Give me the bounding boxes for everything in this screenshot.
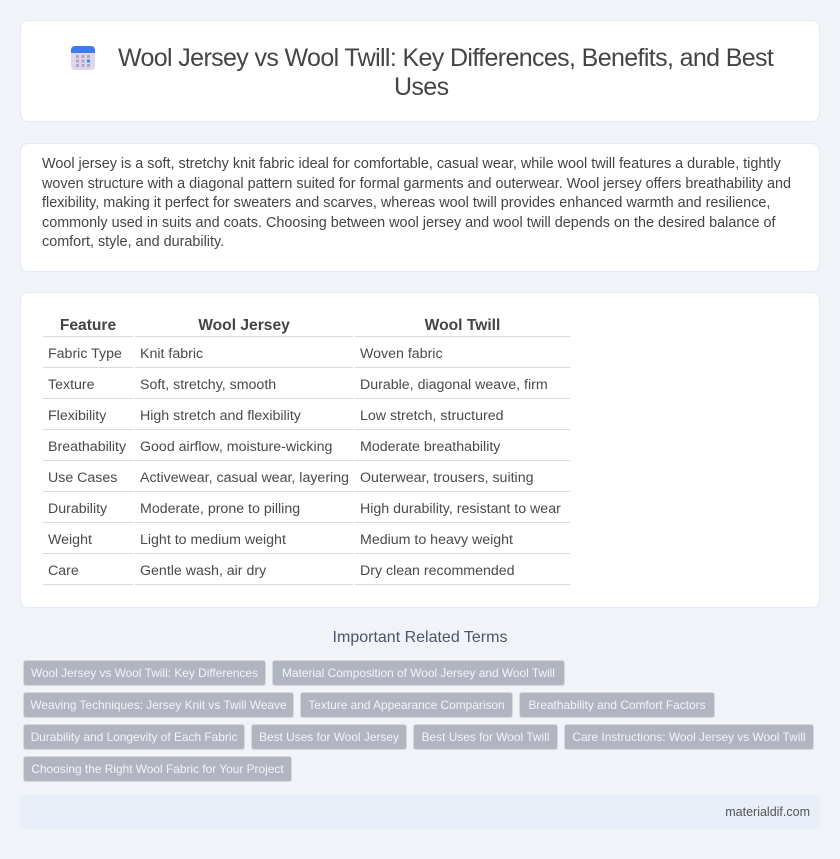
related terms tags: Choosing the Right Wool Fabric for Your Project — [31, 762, 284, 776]
comparison table: Wool Twill — [425, 317, 500, 334]
intro paragraph: comfort, style, and durability. — [42, 234, 224, 250]
comparison table: Soft, stretchy, smooth — [140, 377, 276, 393]
comparison table: Good airflow, moisture-wicking — [140, 439, 332, 455]
comparison table: Feature — [60, 317, 116, 334]
related terms tags: Best Uses for Wool Twill — [422, 730, 549, 744]
related terms tags: Durability and Longevity of Each Fabric — [31, 730, 237, 744]
comparison table: Outerwear, trousers, suiting — [360, 470, 533, 486]
title — [118, 44, 774, 101]
comparison table: Breathability — [48, 439, 126, 455]
intro paragraph — [42, 156, 791, 250]
table card — [20, 292, 820, 608]
comparison table: High durability, resistant to wear — [360, 501, 561, 517]
related terms tags: Weaving Techniques: Jersey Knit vs Twill Weave — [30, 698, 287, 712]
related terms tags: Breathability and Comfort Factors — [528, 698, 706, 712]
comparison table: Wool Jersey — [198, 317, 290, 334]
related terms tags: Best Uses for Wool Jersey — [259, 730, 399, 744]
intro paragraph: Wool jersey is a soft, stretchy knit fabric ideal for comfortable, casual wear, while wool twill features a durable, tightly — [42, 156, 781, 172]
related terms tags — [23, 660, 814, 782]
title: Uses — [394, 73, 448, 101]
comparison table: Fabric Type — [48, 346, 122, 362]
comparison table: Gentle wash, air dry — [140, 563, 266, 579]
comparison table: Low stretch, structured — [360, 408, 504, 424]
intro card — [20, 143, 820, 272]
comparison table: Light to medium weight — [140, 532, 286, 548]
related terms tags: Material Composition of Wool Jersey and Wool Twill — [282, 666, 555, 680]
comparison table: Flexibility — [48, 408, 106, 424]
intro paragraph: commonly used in suits and coats. Choosing between wool jersey and wool twill depends on the desired balance of — [42, 214, 776, 230]
related terms tags: Care Instructions: Wool Jersey vs Wool Twill — [572, 730, 806, 744]
footer bar — [20, 795, 820, 829]
comparison table: Knit fabric — [140, 346, 203, 362]
comparison table: Moderate breathability — [360, 439, 500, 455]
comparison table: Use Cases — [48, 470, 117, 486]
comparison table — [43, 317, 570, 585]
intro paragraph: woven structure with a diagonal pattern suited for formal garments and outerwear. Wool jersey offers breathability and — [42, 176, 791, 192]
footer source text: materialdif.com — [725, 805, 810, 819]
intro paragraph: flexibility, making it perfect for sweaters and scarves, whereas wool twill provides enhanced warmth and resilience, — [42, 195, 770, 211]
comparison table: Moderate, prone to pilling — [140, 501, 300, 517]
comparison table: Activewear, casual wear, layering — [140, 470, 349, 486]
comparison table: High stretch and flexibility — [140, 408, 301, 424]
related terms heading: Important Related Terms — [333, 629, 507, 646]
comparison table: Texture — [48, 377, 95, 393]
comparison table: Medium to heavy weight — [360, 532, 513, 548]
comparison table: Weight — [48, 532, 92, 548]
related terms tags: Texture and Appearance Comparison — [308, 698, 505, 712]
comparison table: Durability — [48, 501, 107, 517]
comparison table: Woven fabric — [360, 346, 443, 362]
header card — [20, 20, 820, 122]
comparison table: Care — [48, 563, 79, 579]
related terms tags: Wool Jersey vs Wool Twill: Key Differences — [31, 666, 258, 680]
title: Wool Jersey vs Wool Twill: Key Differences, Benefits, and Best — [118, 44, 773, 72]
icon: calendar — [71, 46, 95, 70]
comparison table: Durable, diagonal weave, firm — [360, 377, 548, 393]
comparison table: Dry clean recommended — [360, 563, 515, 579]
